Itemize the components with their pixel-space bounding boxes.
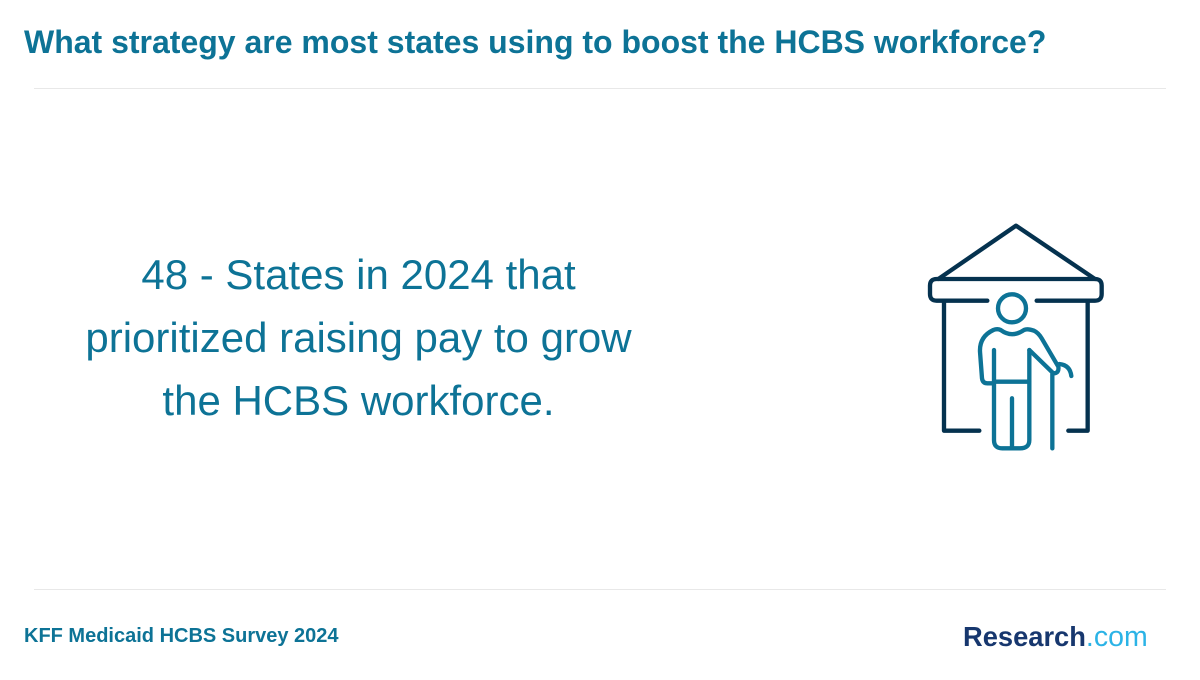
key statistic text: prioritized raising pay to grow — [85, 314, 632, 361]
key statistic text: 48 - States in 2024 that — [141, 251, 576, 298]
logo: Research.com: Research.com — [963, 621, 1148, 653]
title: What strategy are most states using to boost the HCBS workforce? — [24, 24, 1046, 60]
key statistic text: the HCBS workforce. — [162, 377, 555, 424]
source note: KFF Medicaid HCBS Survey 2024 — [24, 625, 339, 647]
icon: elderly person with cane under house — [928, 224, 1104, 450]
key statistic text — [85, 251, 632, 424]
